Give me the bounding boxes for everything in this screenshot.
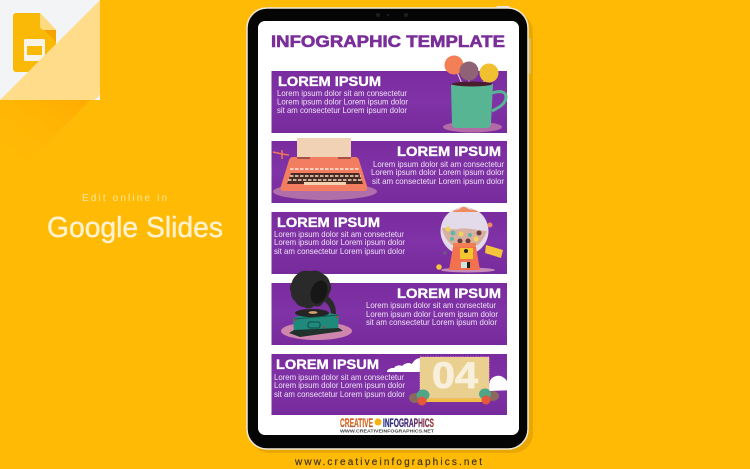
icon: gumball machine (436, 207, 503, 272)
text block 5: Lorem ipsum dolor sit am consectetur (274, 373, 404, 382)
logo: Creative Infographics: CREATIVE (340, 416, 373, 430)
logo: Creative Infographics (340, 416, 434, 434)
panel: banner 3 (272, 207, 507, 274)
heading 4: LOREM IPSUM (397, 285, 501, 301)
panel: banner 2 (272, 138, 507, 203)
text block 2: Lorem ipsum dolor Lorem ipsum dolor (371, 168, 504, 177)
text block 1: sit am consectetur Lorem ipsum dolor (277, 106, 407, 115)
text block 4: Lorem ipsum dolor sit am consectetur (366, 301, 496, 310)
text block 1 (277, 89, 408, 115)
panel: banner 1 (272, 56, 507, 133)
text block 2: sit am consectetur Lorem ipsum dolor (372, 177, 504, 186)
icon: typewriter (273, 138, 377, 200)
text block 3: Lorem ipsum dolor Lorem ipsum dolor (274, 238, 405, 247)
logo: Creative Infographics: WWW.CREATIVEINFOGRAPHICS.NET (340, 428, 434, 434)
screen (258, 21, 519, 435)
title: INFOGRAPHIC TEMPLATE (271, 33, 505, 51)
tablet (247, 6, 533, 453)
text: Google Slides: Google Slides (47, 212, 223, 244)
icon: postage stamp with 04 (387, 355, 518, 406)
text block 4: sit am consectetur Lorem ipsum dolor (366, 318, 497, 327)
text: edit online in: Edit online in (82, 193, 167, 204)
text: website url: www.creativeinfographics.net (294, 457, 482, 468)
panel: banner 4 (272, 271, 507, 345)
text block 1: Lorem ipsum dolor Lorem ipsum dolor (277, 98, 408, 106)
folded corner with Google Slides icon (0, 0, 100, 165)
panel: banner 5 (272, 354, 518, 415)
text block 2 (371, 160, 504, 186)
heading 1: LOREM IPSUM (278, 73, 381, 89)
text block 3: sit am consectetur Lorem ipsum dolor (274, 247, 405, 256)
text block 4: Lorem ipsum dolor Lorem ipsum dolor (366, 310, 498, 319)
heading 2: LOREM IPSUM (397, 143, 501, 159)
heading 5: LOREM IPSUM (276, 356, 379, 372)
icon: gramophone (281, 271, 352, 340)
text block 3 (274, 230, 405, 256)
text block 3: Lorem ipsum dolor sit am consectetur (274, 230, 404, 239)
number 04: 04 (432, 355, 478, 396)
text block 2: Lorem ipsum dolor sit am consectetur (373, 160, 504, 169)
heading 3: LOREM IPSUM (277, 214, 380, 230)
icon: slides document (13, 13, 56, 72)
icon: mug with lollipops (443, 56, 506, 132)
text block 5 (274, 373, 405, 399)
text block 5: Lorem ipsum dolor Lorem ipsum dolor (274, 381, 405, 390)
logo: Creative Infographics: INFOGRAPHICS (383, 416, 434, 430)
text block 1: Lorem ipsum dolor sit am consectetur (277, 89, 407, 98)
text block 5: sit am consectetur Lorem ipsum dolor (274, 390, 405, 399)
text block 4 (366, 301, 498, 327)
